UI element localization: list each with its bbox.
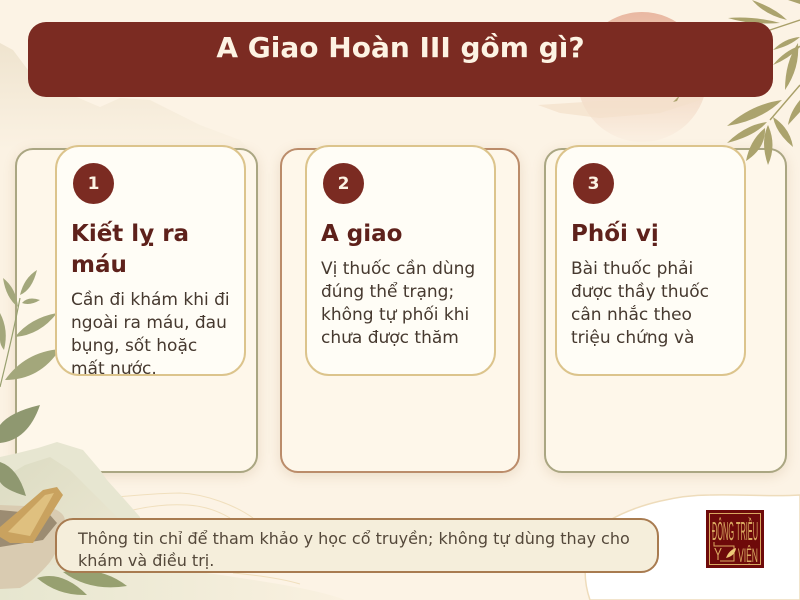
panel: card 3 back — [544, 148, 787, 473]
panel: card 1 back — [15, 148, 258, 473]
number badge 3: 3 — [588, 174, 599, 194]
text 2: Vị thuốc cần dùng đúng thể trạng; không tự phối khi chưa được thăm — [321, 259, 475, 348]
left sprig — [0, 270, 60, 496]
panel: A giao — [305, 145, 496, 376]
icon: logo seal: VIỆN — [738, 545, 758, 567]
panel: Kiết lỵ ra máu — [55, 145, 246, 376]
title banner — [28, 22, 773, 97]
mountains bottom left — [0, 442, 140, 570]
number badge 1 — [73, 163, 114, 204]
number badge 1: 1 — [88, 174, 99, 194]
sun — [577, 12, 707, 142]
icon: logo seal: Y — [714, 545, 722, 565]
icon: logo seal — [706, 510, 764, 568]
panel: card 2 back — [280, 148, 520, 473]
number badge 3 — [573, 163, 614, 204]
disclaimer note: Thông tin chỉ để tham khảo y học cổ truyền; không tự dùng thay cho khám và điều trị. — [78, 529, 630, 570]
bottom leaves — [37, 570, 127, 595]
text 3: Bài thuốc phải được thầy thuốc cân nhắc theo triệu chứng và — [571, 259, 709, 348]
mountains top left — [0, 43, 250, 150]
bamboo — [673, 0, 800, 165]
number badge 2: 2 — [338, 174, 349, 194]
disclaimer note — [55, 518, 659, 573]
roots — [0, 487, 63, 543]
ground wash — [0, 563, 345, 600]
wavy lines — [117, 493, 300, 584]
panel: Phối vị — [555, 145, 746, 376]
bowl — [0, 505, 65, 589]
heading 2: A giao — [321, 221, 402, 247]
heading 1: Kiết lỵ ra máu — [71, 221, 189, 278]
title banner: A Giao Hoàn III gồm gì? — [216, 31, 585, 64]
white blob bottom right — [585, 495, 800, 600]
heading 3: Phối vị — [571, 221, 659, 247]
number badge 2 — [323, 163, 364, 204]
